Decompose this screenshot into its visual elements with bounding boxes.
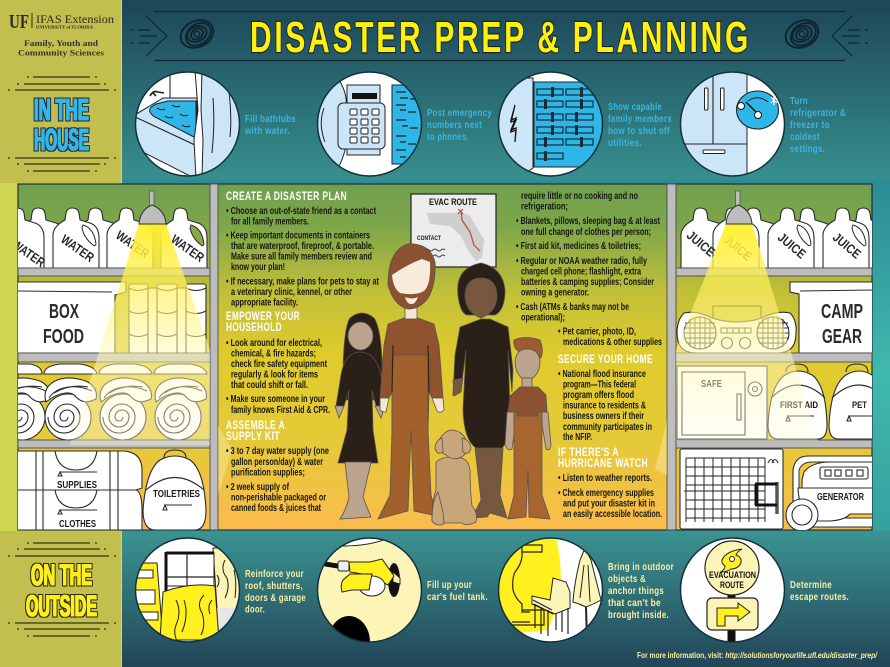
text: secure your home	[558, 354, 653, 443]
caption: fuel tank: car's fuel tank.	[427, 591, 488, 603]
circle: refrigerator setting	[680, 71, 786, 177]
safe: SAFE	[701, 379, 722, 390]
department line two: Community Sciences	[18, 48, 105, 58]
text: assemble a supply kit: purification supplies;	[231, 466, 305, 478]
right lamp light beam	[676, 224, 818, 441]
icon: right hurricane swirl	[781, 15, 823, 53]
text: assemble a supply kit: operational);	[521, 312, 565, 324]
text: assemble a supply kit: gallon person/day) & water	[231, 456, 323, 468]
caption: refrigerator	[790, 95, 846, 155]
person: daughter	[335, 313, 385, 519]
water jugs	[18, 208, 208, 268]
text: create a disaster plan	[226, 191, 379, 308]
juice jugs: JUICE	[830, 230, 864, 262]
caption: fuel tank: Fill up your	[427, 579, 472, 591]
circle: evacuation route sign	[680, 538, 784, 645]
heading: in the house	[34, 92, 89, 157]
sidebar: on the outside	[0, 531, 122, 667]
text: if there's a hurricane watch: • Listen to weather reports.	[558, 472, 652, 484]
background: top band	[0, 0, 890, 184]
water jugs: WATER	[113, 228, 152, 261]
map: florida	[427, 212, 484, 261]
text: create a disaster plan: know your plan!	[231, 261, 285, 273]
heading: in the house: IN THE	[34, 92, 89, 127]
circle: evacuation route sign: EVACUATION	[709, 570, 756, 580]
right shelves	[677, 208, 890, 531]
map: contact: CONTACT	[417, 235, 441, 242]
text: create a disaster plan: appropriate facility.	[231, 296, 298, 308]
caption: shutters: roof, shutters,	[245, 580, 303, 592]
water jugs: WATER	[168, 232, 207, 265]
text: assemble a supply kit: • First aid kit, medicines & toiletries;	[516, 240, 641, 252]
text: if there's a hurricane watch: • Check emergency supplies	[558, 487, 654, 499]
title banner	[154, 12, 845, 62]
text: create a disaster plan: • Keep important documents in containers	[226, 230, 370, 242]
text: assemble a supply kit: canned foods & juices that	[231, 502, 321, 514]
circle: fill bathtub	[133, 70, 242, 178]
backpack: toiletries	[143, 450, 206, 530]
icon: right wind arrow	[832, 16, 868, 56]
icon: left wind arrow	[131, 16, 167, 56]
box food: BOX	[49, 301, 79, 323]
juice jugs: JUICE	[775, 230, 809, 262]
text: assemble a supply kit: medications & other supplies	[563, 336, 662, 348]
text: assemble a supply kit: owning a generator.	[521, 286, 589, 298]
box food: FOOD	[43, 326, 84, 348]
caption: bathtub: Fill bathtubs	[245, 113, 296, 125]
camp gear box	[790, 282, 876, 353]
text: assemble a supply kit: require little or no cooking and no	[521, 190, 638, 202]
caption: refrigerator: Turn	[790, 95, 808, 107]
camp gear box: CAMP	[821, 301, 863, 323]
text: secure your home: • National flood insurance	[558, 368, 646, 380]
heading: on the outside: OUTSIDE	[26, 590, 97, 623]
safe	[677, 366, 767, 439]
text: secure your home: SECURE YOUR HOME	[558, 354, 653, 366]
backpack: pet	[828, 364, 872, 440]
backpack: pet: PET	[852, 400, 867, 411]
text: if there's a hurricane watch: and put your disaster kit in	[563, 498, 655, 510]
text: empower your household: chemical, & fire hazards;	[231, 348, 316, 360]
camp gear box: GEAR	[822, 326, 862, 348]
water jugs: WATER	[9, 237, 48, 270]
person: father	[378, 244, 444, 519]
sidebar: in the house	[0, 0, 122, 183]
text: empower your household: HOUSEHOLD	[226, 322, 282, 334]
text: assemble a supply kit: ASSEMBLE A	[226, 420, 285, 432]
caption: outdoor objects: brought inside.	[608, 609, 669, 621]
text: assemble a supply kit: • Cash (ATMs & banks may not be	[516, 301, 629, 313]
caption: bathtub	[244, 113, 296, 137]
map: heading: EVAC ROUTE	[429, 197, 477, 208]
water jugs: WATER	[58, 232, 97, 265]
text: assemble a supply kit: SUPPLY KIT	[226, 431, 280, 443]
caption: bathtub: with water.	[244, 125, 290, 137]
background: right margin of middle band	[121, 180, 890, 531]
text: create a disaster plan: a veterinary clinic, kennel, or other	[231, 286, 352, 298]
logo block	[9, 11, 114, 58]
caption: outdoor objects	[608, 561, 674, 621]
caption: shutters: doors & garage	[245, 592, 306, 604]
text: HOUSE	[34, 122, 89, 157]
caption: refrigerator: settings.	[790, 143, 825, 155]
person: son	[505, 338, 551, 519]
text: assemble a supply kit: • Blankets, pillows, sleeping bag & at least	[516, 215, 660, 227]
caption: shutters: door.	[245, 604, 265, 616]
text: empower your household: family knows First Aid & CPR.	[231, 404, 330, 416]
circle: utility shut off panel	[495, 72, 606, 178]
text: create a disaster plan: • If necessary, make plans for pets to stay at	[226, 276, 379, 288]
caption: refrigerator: coldest	[790, 131, 820, 143]
caption: emergency numbers: to phones.	[427, 131, 469, 143]
towels and blankets	[0, 364, 207, 440]
circle: reinforce shutters	[133, 538, 245, 642]
text: if there's a hurricane watch: IF THERE'S A	[558, 447, 619, 459]
duffel bag: supplies	[14, 451, 142, 491]
caption: utilities: utilities.	[608, 137, 642, 149]
backpack: first aid: FIRST AID	[780, 400, 818, 411]
caption: escape routes: Determine	[790, 579, 832, 591]
juice jugs	[681, 208, 890, 268]
text: assemble a supply kit: batteries & camping supplies; Consider	[521, 276, 654, 288]
text: secure your home: community participates in	[563, 421, 652, 433]
caption: outdoor objects: anchor things	[608, 585, 664, 597]
shelf boards and posts	[18, 184, 872, 530]
text: secure your home: business owners if their	[563, 410, 644, 422]
backpack: first aid	[768, 364, 827, 439]
caption: outdoor objects: that can't be	[608, 597, 661, 609]
generator: GENERATOR	[817, 492, 865, 503]
text: assemble a supply kit: • Regular or NOAA weather radio, fully	[516, 255, 647, 267]
caption: shutters: Reinforce your	[245, 568, 304, 580]
caption: shutters	[245, 568, 306, 616]
duffel bag: supplies: SUPPLIES	[57, 480, 97, 491]
caption: refrigerator: refrigerator &	[790, 107, 846, 119]
text: create a disaster plan: CREATE A DISASTER PLAN	[226, 191, 347, 203]
sidebar: middle strip	[0, 183, 121, 531]
department line one: Family, Youth and	[24, 38, 98, 48]
caption: emergency numbers: numbers next	[427, 119, 482, 131]
text: secure your home: insurance to residents &	[563, 400, 646, 412]
text: if there's a hurricane watch: an easily accessible location.	[563, 508, 662, 520]
duffel bag: clothes	[14, 490, 142, 530]
text: secure your home: program—This federal	[563, 378, 636, 390]
text: secure your home: program offers flood	[563, 389, 634, 401]
text: assemble a supply kit	[226, 190, 662, 514]
grill	[680, 449, 783, 529]
duffel bag: clothes: CLOTHES	[59, 519, 96, 530]
text: empower your household: that could shift or fall.	[231, 379, 308, 391]
box food	[15, 282, 126, 353]
caption: refrigerator: freezer to	[790, 119, 830, 131]
main panel background	[18, 184, 872, 530]
caption: emergency numbers: Post emergency	[427, 107, 492, 119]
text: assemble a supply kit: non-perishable packaged or	[231, 492, 326, 504]
text: assemble a supply kit: • 2 week supply of	[226, 481, 289, 493]
text: secure your home: the NFIP.	[563, 431, 592, 443]
text: if there's a hurricane watch: HURRICANE WATCH	[558, 458, 648, 470]
left lamp light beam	[70, 224, 210, 445]
caption: escape routes: escape routes.	[790, 591, 849, 603]
text: create a disaster plan: Make sure all family members review and	[231, 250, 372, 262]
text: assemble a supply kit: • 3 to 7 day water supply (one	[226, 445, 329, 457]
caption: outdoor objects: objects &	[608, 573, 646, 585]
caption: outdoor objects: Bring in outdoor	[608, 561, 674, 573]
generator	[786, 456, 880, 531]
text: empower your household: • Look around for electrical,	[226, 337, 322, 349]
boom box radio	[677, 306, 796, 353]
caption: emergency numbers	[427, 107, 492, 143]
text: create a disaster plan: for all family members.	[231, 216, 309, 228]
caption: utilities	[608, 101, 672, 149]
juice jugs: JUICE	[721, 232, 755, 264]
right lamp	[676, 191, 818, 441]
left lamp	[70, 191, 210, 445]
text: create a disaster plan: • Choose an out-of-state friend as a contact	[226, 205, 376, 217]
logo: IFAS Extension: IFAS Extension	[36, 14, 114, 26]
logo: university: UNIVERSITY of FLORIDA	[36, 24, 94, 30]
caption: utilities: family members	[608, 113, 672, 125]
person: mother	[453, 263, 513, 518]
text: assemble a supply kit: • Pet carrier, photo, ID,	[558, 326, 636, 338]
text: empower your household: check fire safety equipment	[231, 358, 327, 370]
caption: utilities: Show capable	[608, 101, 662, 113]
dog	[432, 430, 476, 525]
text: empower your household	[226, 311, 330, 416]
text: empower your household: EMPOWER YOUR	[226, 311, 300, 323]
juice jugs: JUICE	[684, 228, 718, 260]
caption: fuel tank	[427, 579, 488, 603]
text: if there's a hurricane watch	[558, 447, 662, 520]
heading: on the outside	[26, 559, 97, 623]
circle: car fuel tank	[316, 537, 422, 643]
evacuation route map	[411, 194, 496, 267]
text: assemble a supply kit: refrigeration;	[521, 200, 568, 212]
circle: outdoor objects	[495, 535, 602, 642]
logo: UF mark: UF	[9, 11, 29, 33]
text: create a disaster plan: that are waterproof, fireproof, & portable.	[231, 240, 374, 252]
caption: utilities: how to shut off	[608, 125, 670, 137]
canned food	[129, 284, 206, 353]
background: bottom band	[0, 530, 890, 667]
text: empower your household: • Make sure someone in your	[226, 393, 325, 405]
text: assemble a supply kit: one full change of clothes per person;	[521, 226, 651, 238]
icon: left hurricane swirl	[176, 15, 218, 53]
left shelves	[0, 208, 207, 530]
text: empower your household: regularly & look for items	[231, 368, 318, 380]
text: assemble a supply kit: charged cell phone; flashlight, extra	[521, 266, 641, 278]
circle: emergency numbers on phone	[315, 70, 426, 180]
backpack: toiletries: TOILETRIES	[153, 489, 200, 500]
circle: evacuation route sign: ROUTE	[720, 580, 744, 590]
map: route line	[461, 210, 480, 251]
caption: escape routes	[790, 579, 849, 603]
heading: on the outside: ON THE	[31, 559, 92, 592]
